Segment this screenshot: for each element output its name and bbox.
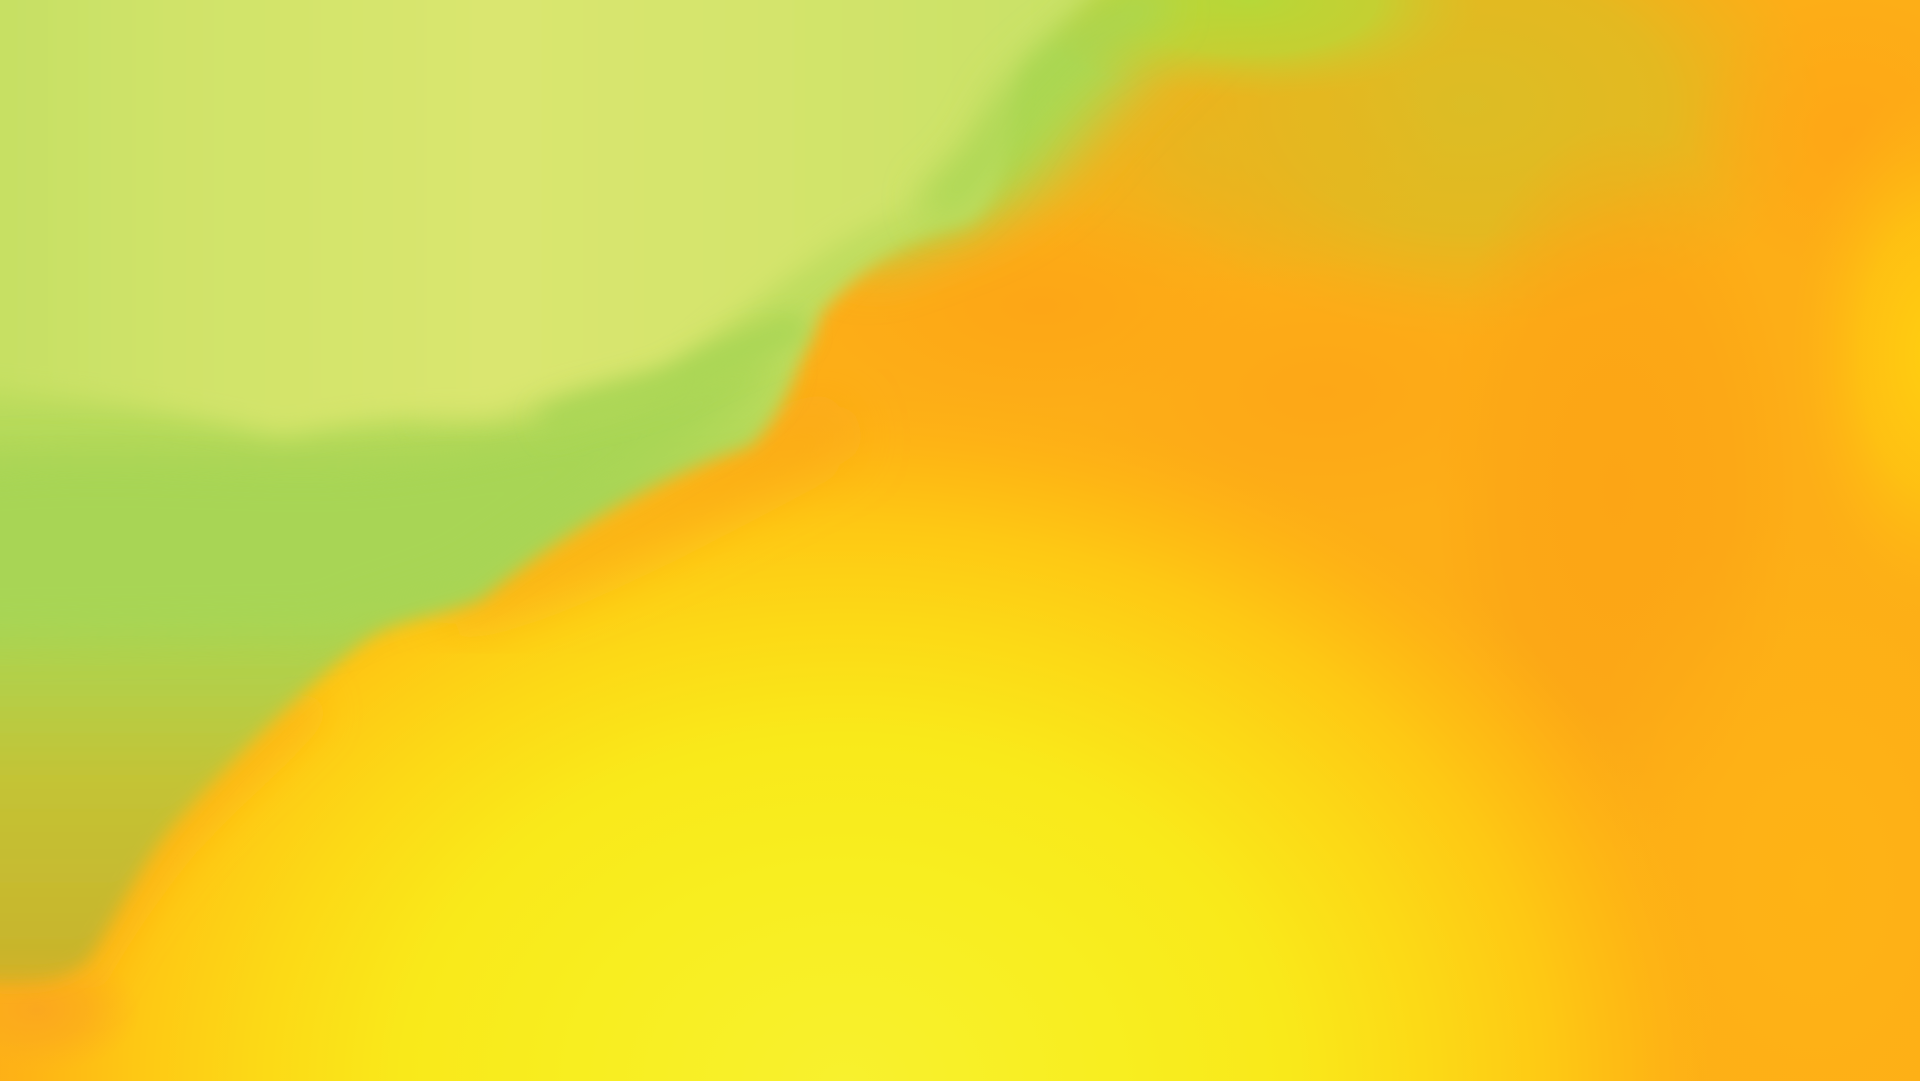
- green upper-left region: [0, 114, 998, 990]
- green shade below lime area: [543, 368, 766, 456]
- green ridge along boundary: [931, 0, 1163, 211]
- yellow mound: [40, 451, 1646, 1081]
- green ridge mid boundary: [545, 324, 802, 426]
- lower-left orange ridge: [20, 458, 796, 1042]
- diffuse green wedge at top: [862, 0, 1438, 288]
- right side amber and yellow glow: [1554, 178, 1920, 568]
- pale upper-left lime area: [0, 0, 1151, 436]
- upper-right mustard haze: [1091, 0, 1748, 296]
- lighter shelf under lime edge: [416, 356, 673, 422]
